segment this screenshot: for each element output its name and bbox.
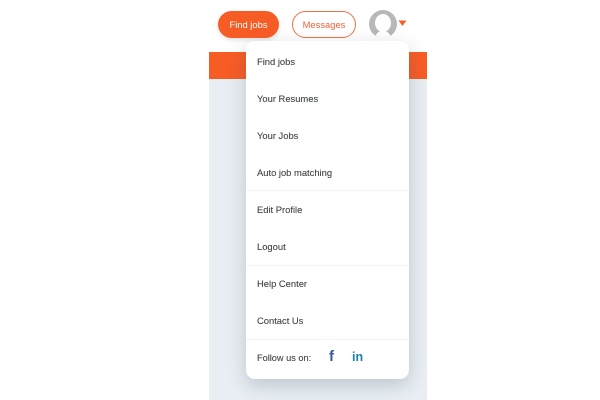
- menu item: Find jobs: Find jobs: [257, 56, 295, 67]
- page background panel: [209, 52, 427, 400]
- icon: dropdown caret: [398, 20, 406, 26]
- button: Find jobs: Find jobs: [229, 19, 268, 30]
- button: Messages: [292, 11, 356, 38]
- menu item: Edit Profile: Edit Profile: [257, 204, 302, 215]
- button: Messages: Messages: [303, 19, 345, 30]
- dropdown menu panel: [246, 41, 409, 379]
- icon: linkedin: in: [352, 350, 363, 364]
- menu item: Your Jobs: Your Jobs: [257, 130, 298, 141]
- menu item: Your Resumes: Your Resumes: [257, 93, 318, 104]
- icon: user avatar: [369, 10, 397, 38]
- menu item: Auto job matching: Auto job matching: [257, 167, 332, 178]
- menu item: Contact Us: Contact Us: [257, 315, 303, 326]
- menu item: Logout: Logout: [257, 241, 286, 252]
- icon: facebook: f: [329, 348, 334, 365]
- orange banner: [209, 52, 427, 79]
- button: Find jobs: [218, 11, 279, 38]
- menu item: Help Center: Help Center: [257, 278, 307, 289]
- follow us label: Follow us on:: [257, 353, 311, 363]
